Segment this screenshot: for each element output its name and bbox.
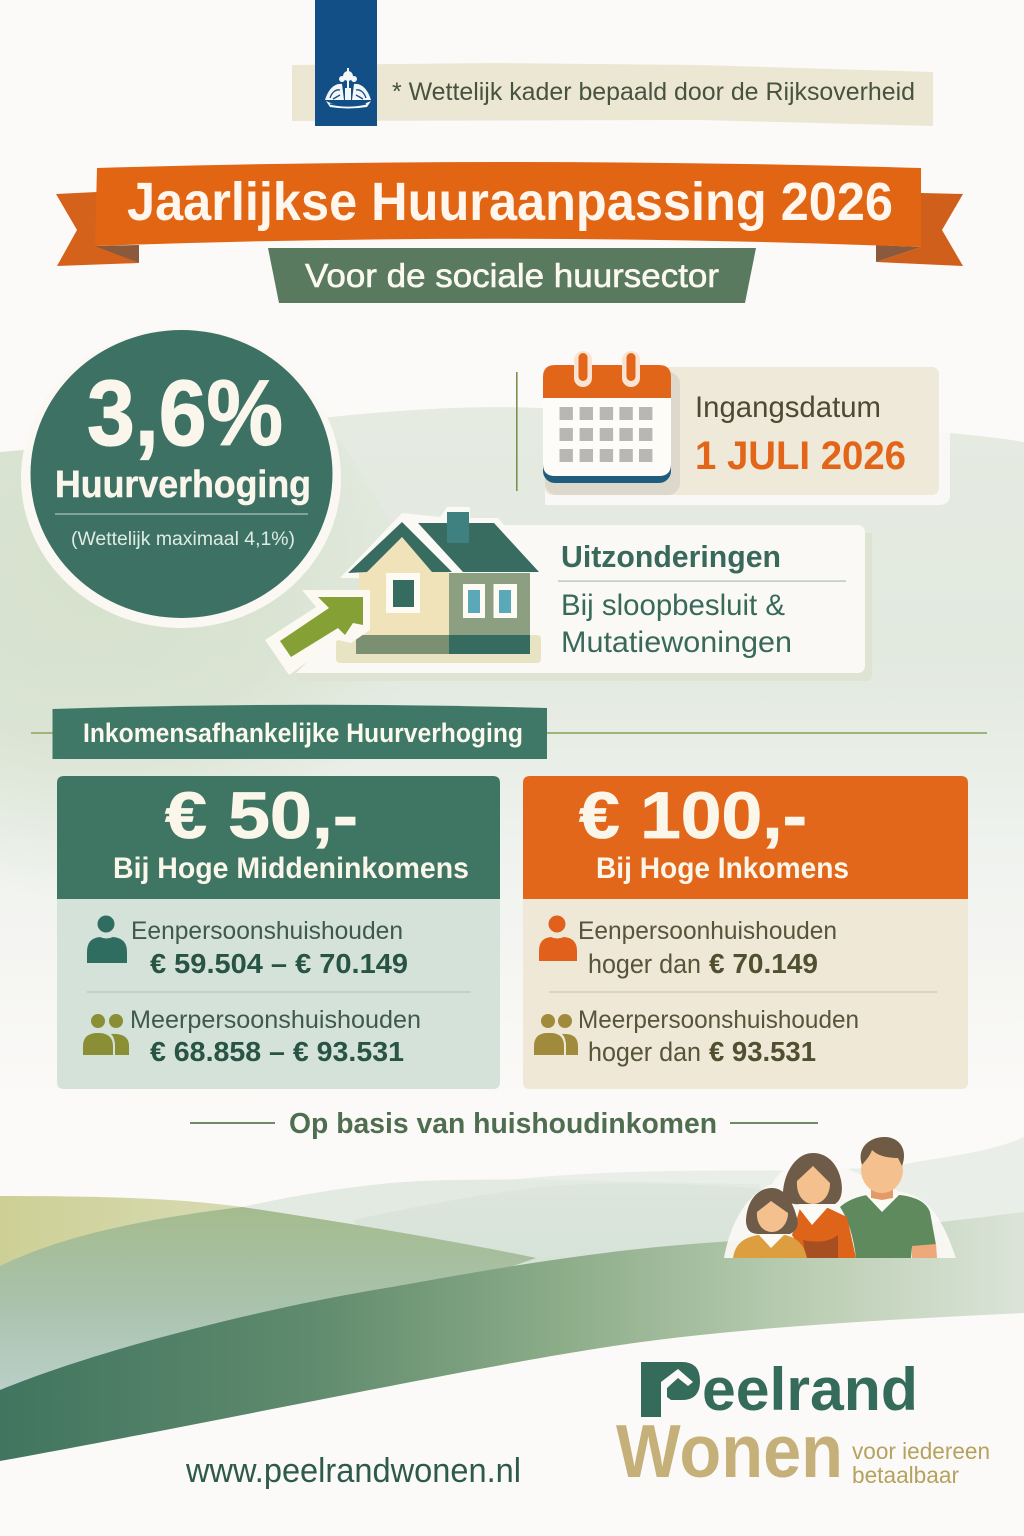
background: lower hills [0, 1137, 1024, 1461]
icon: two persons [83, 1014, 129, 1055]
left window [386, 573, 420, 613]
exceptions text: Bij sloopbesluit & [561, 589, 785, 622]
exceptions heading: Uitzonderingen [561, 539, 781, 574]
arrow [265, 590, 370, 675]
background: upper hills [0, 407, 1024, 1110]
ribbon body [95, 162, 921, 247]
title banner [56, 162, 963, 266]
icon: one person [87, 916, 127, 963]
panel: hoge middeninkomens: € 59.504 – € 70.149 [150, 948, 408, 979]
date value: 1 JULI 2026 [695, 434, 906, 478]
icon: house with arrow [265, 507, 548, 675]
strip text: * Wettelijk kader bepaald door de Rijksoverheid [392, 78, 915, 106]
single household: Eenpersoonshuishouden [131, 917, 403, 945]
logo: Peelrand Wonen: betaalbaar [852, 1462, 959, 1488]
gable roof [348, 522, 452, 573]
panel: hoge middeninkomens: € 68.858 – € 93.531 [150, 1036, 404, 1067]
main roof [418, 523, 539, 572]
icon: two persons [534, 1014, 578, 1055]
multi household: Meerpersoonshuishouden [578, 1006, 859, 1034]
icon: crown emblem [325, 68, 371, 108]
percentage: 3,6% [87, 361, 283, 465]
right ribbon tail [876, 193, 963, 266]
left ribbon tail [56, 192, 139, 266]
date label: Ingangsdatum [695, 391, 881, 424]
right windows [463, 584, 485, 618]
amount label: Bij Hoge Middeninkomens [113, 852, 469, 885]
icon: one person [539, 916, 577, 961]
government strip note [292, 63, 933, 126]
panel: exceptions: Mutatiewoningen [561, 626, 792, 659]
panel: hoge inkomens: € 93.531 [709, 1036, 816, 1067]
section heading: income-dependent [31, 705, 987, 759]
single household: Eenpersoonhuishouden [578, 917, 837, 945]
child [733, 1188, 807, 1258]
subtitle banner: Voor de sociale huursector [305, 257, 719, 294]
base [356, 635, 449, 654]
logo word: eelrand: eelrand [702, 1356, 918, 1423]
amount: € 50,- [165, 778, 358, 852]
father [840, 1137, 937, 1258]
logo word: Wonen: Wonen [616, 1409, 843, 1493]
panel: effective date [543, 351, 950, 505]
divider: vertical [516, 372, 518, 491]
right wall [449, 573, 530, 635]
panel: hoge inkomens: hoger dan [588, 1037, 701, 1067]
logo: Peelrand Wonen [616, 1356, 990, 1493]
rent increase circle [21, 328, 341, 628]
front wall [359, 537, 449, 635]
label: Huurverhoging [55, 464, 311, 506]
multi household: Meerpersoonshuishouden [130, 1006, 421, 1034]
illustration: family [724, 1137, 956, 1258]
logo mark: P with roof [641, 1362, 700, 1417]
mother [783, 1153, 856, 1258]
amount label: Bij Hoge Inkomens [596, 852, 849, 885]
panel: hoge middeninkomens [57, 776, 500, 1089]
panel: exceptions [265, 507, 872, 681]
logo tagline: voor iedereen [852, 1438, 990, 1464]
website: www.peelrandwonen.nl [185, 1452, 521, 1490]
amount: € 100,- [579, 778, 807, 852]
legal maximum: (Wettelijk maximaal 4,1%) [71, 529, 295, 550]
panel: hoge inkomens [523, 776, 968, 1089]
caption: household income: Op basis van huishoudinkomen [289, 1108, 717, 1140]
title: Jaarlijkse Huuraanpassing 2026 [127, 172, 893, 232]
section heading: income-dependent: Inkomensafhankelijke Huurverhoging [83, 718, 523, 748]
subtitle banner [268, 248, 756, 303]
icon: calendar [543, 351, 671, 483]
chimney [447, 512, 469, 543]
blue ribbon with emblem [315, 0, 377, 126]
panel: hoge inkomens: € 70.149 [709, 948, 818, 979]
panel: hoge inkomens: hoger dan [588, 949, 701, 979]
